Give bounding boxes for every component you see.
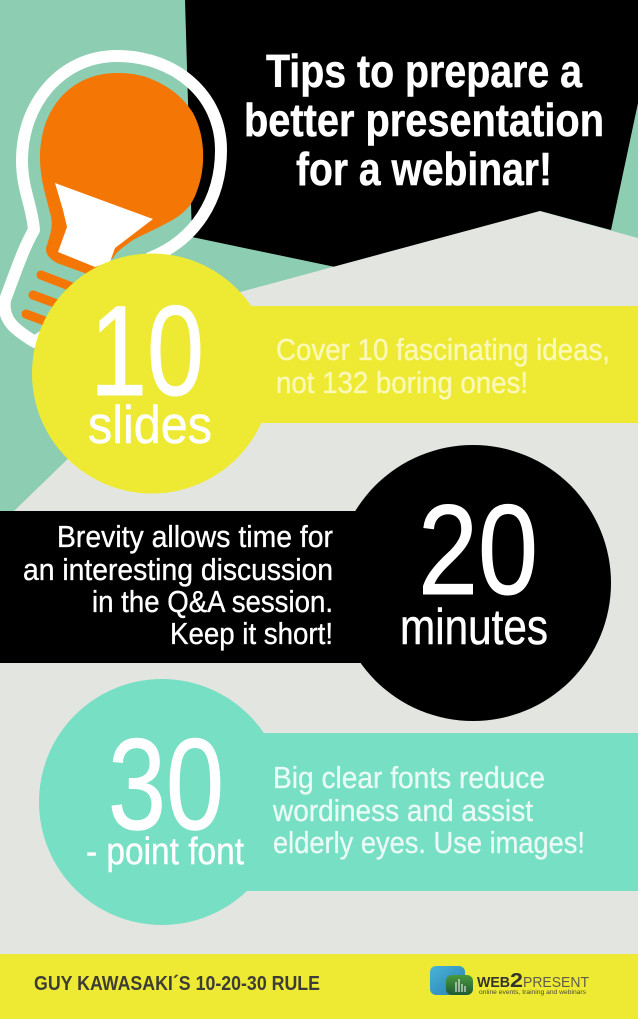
- panel: 20 minutes: [0, 445, 611, 721]
- panel: 30 point font: wordiness and assist: [272, 793, 533, 828]
- title: Tips to prepare a: [266, 45, 582, 97]
- teal background: [0, 0, 638, 520]
- panel: 20 minutes: in the Q&A session.: [92, 584, 333, 619]
- panel: 20 minutes: Brevity allows time for: [57, 519, 333, 554]
- panel: 10 slides: slides: [88, 396, 212, 455]
- panel: 30 point font: - point font: [86, 831, 244, 873]
- panel: 20 minutes: minutes: [400, 599, 548, 655]
- panel: 20 minutes: an interesting discussion: [23, 552, 333, 587]
- panel: 10 slides: 10: [90, 280, 204, 423]
- panel: 20 minutes: 20: [418, 479, 538, 622]
- panel: 30 point font: 30: [108, 711, 224, 857]
- logo: Web2Present: online events, training and webinars: [479, 989, 587, 996]
- footer band: [0, 954, 638, 1019]
- panel: 10 slides: [32, 254, 638, 494]
- footer band: GUY KAWASAKI´S 10-20-30 RULE: [34, 973, 320, 995]
- panel: 30 point font: [39, 679, 638, 925]
- icon: light bulb: [5, 56, 221, 342]
- title: [244, 45, 604, 195]
- panel: 10 slides: not 132 boring ones!: [276, 365, 528, 400]
- logo: Web2Present: 2: [510, 970, 523, 992]
- title: for a webinar!: [296, 143, 552, 195]
- black header shape: [185, 0, 638, 268]
- panel: 20 minutes: Keep it short!: [170, 616, 333, 651]
- logo: Web2Present: [430, 966, 589, 996]
- logo: Web2Present: WEB: [477, 974, 510, 991]
- grey background: [0, 211, 638, 1019]
- panel: 30 point font: elderly eyes. Use images!: [273, 825, 585, 860]
- logo: Web2Present: PRESENT: [523, 974, 589, 991]
- panel: 30 point font: Big clear fonts reduce: [273, 760, 545, 795]
